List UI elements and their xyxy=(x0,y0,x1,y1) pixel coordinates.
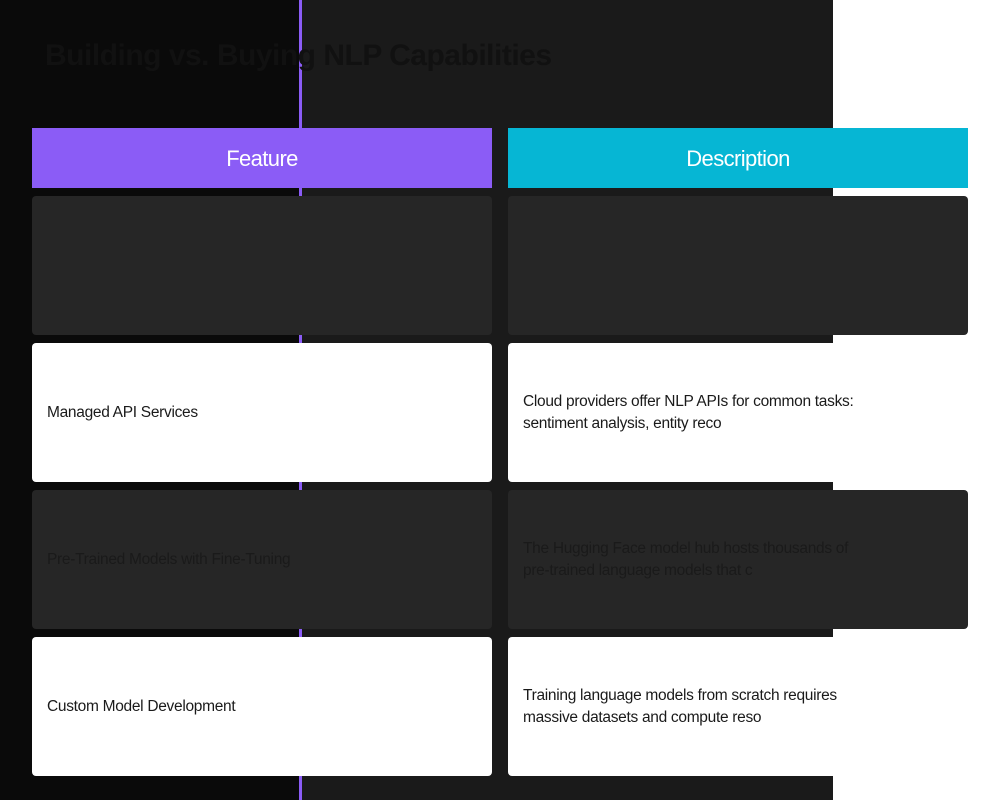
row 4 description xyxy=(508,637,968,776)
header: description: Description xyxy=(686,146,790,171)
row 4 description: Training language models from scratch requires massive datasets and compute reso xyxy=(523,686,837,726)
row 3 feature: Pre-Trained Models with Fine-Tuning xyxy=(47,550,290,568)
row 2 description: Cloud providers offer NLP APIs for common tasks: sentiment analysis, entity reco xyxy=(523,392,853,432)
title: Building vs. Buying NLP Capabilities xyxy=(45,39,552,72)
header: feature xyxy=(32,128,492,188)
row 3 description: The Hugging Face model hub hosts thousands of pre-trained language models that c xyxy=(523,540,848,578)
row 2 description xyxy=(508,343,968,482)
row 2 feature xyxy=(32,343,492,482)
row 4 feature xyxy=(32,637,492,776)
row 3 feature xyxy=(32,490,492,629)
header: description xyxy=(508,128,968,188)
row 1 feature xyxy=(32,196,492,335)
row 2 feature: Managed API Services xyxy=(47,404,198,420)
row 3 description xyxy=(508,490,968,629)
row 4 feature: Custom Model Development xyxy=(47,698,235,714)
row 1 description xyxy=(508,196,968,335)
header: feature: Feature xyxy=(226,146,298,171)
